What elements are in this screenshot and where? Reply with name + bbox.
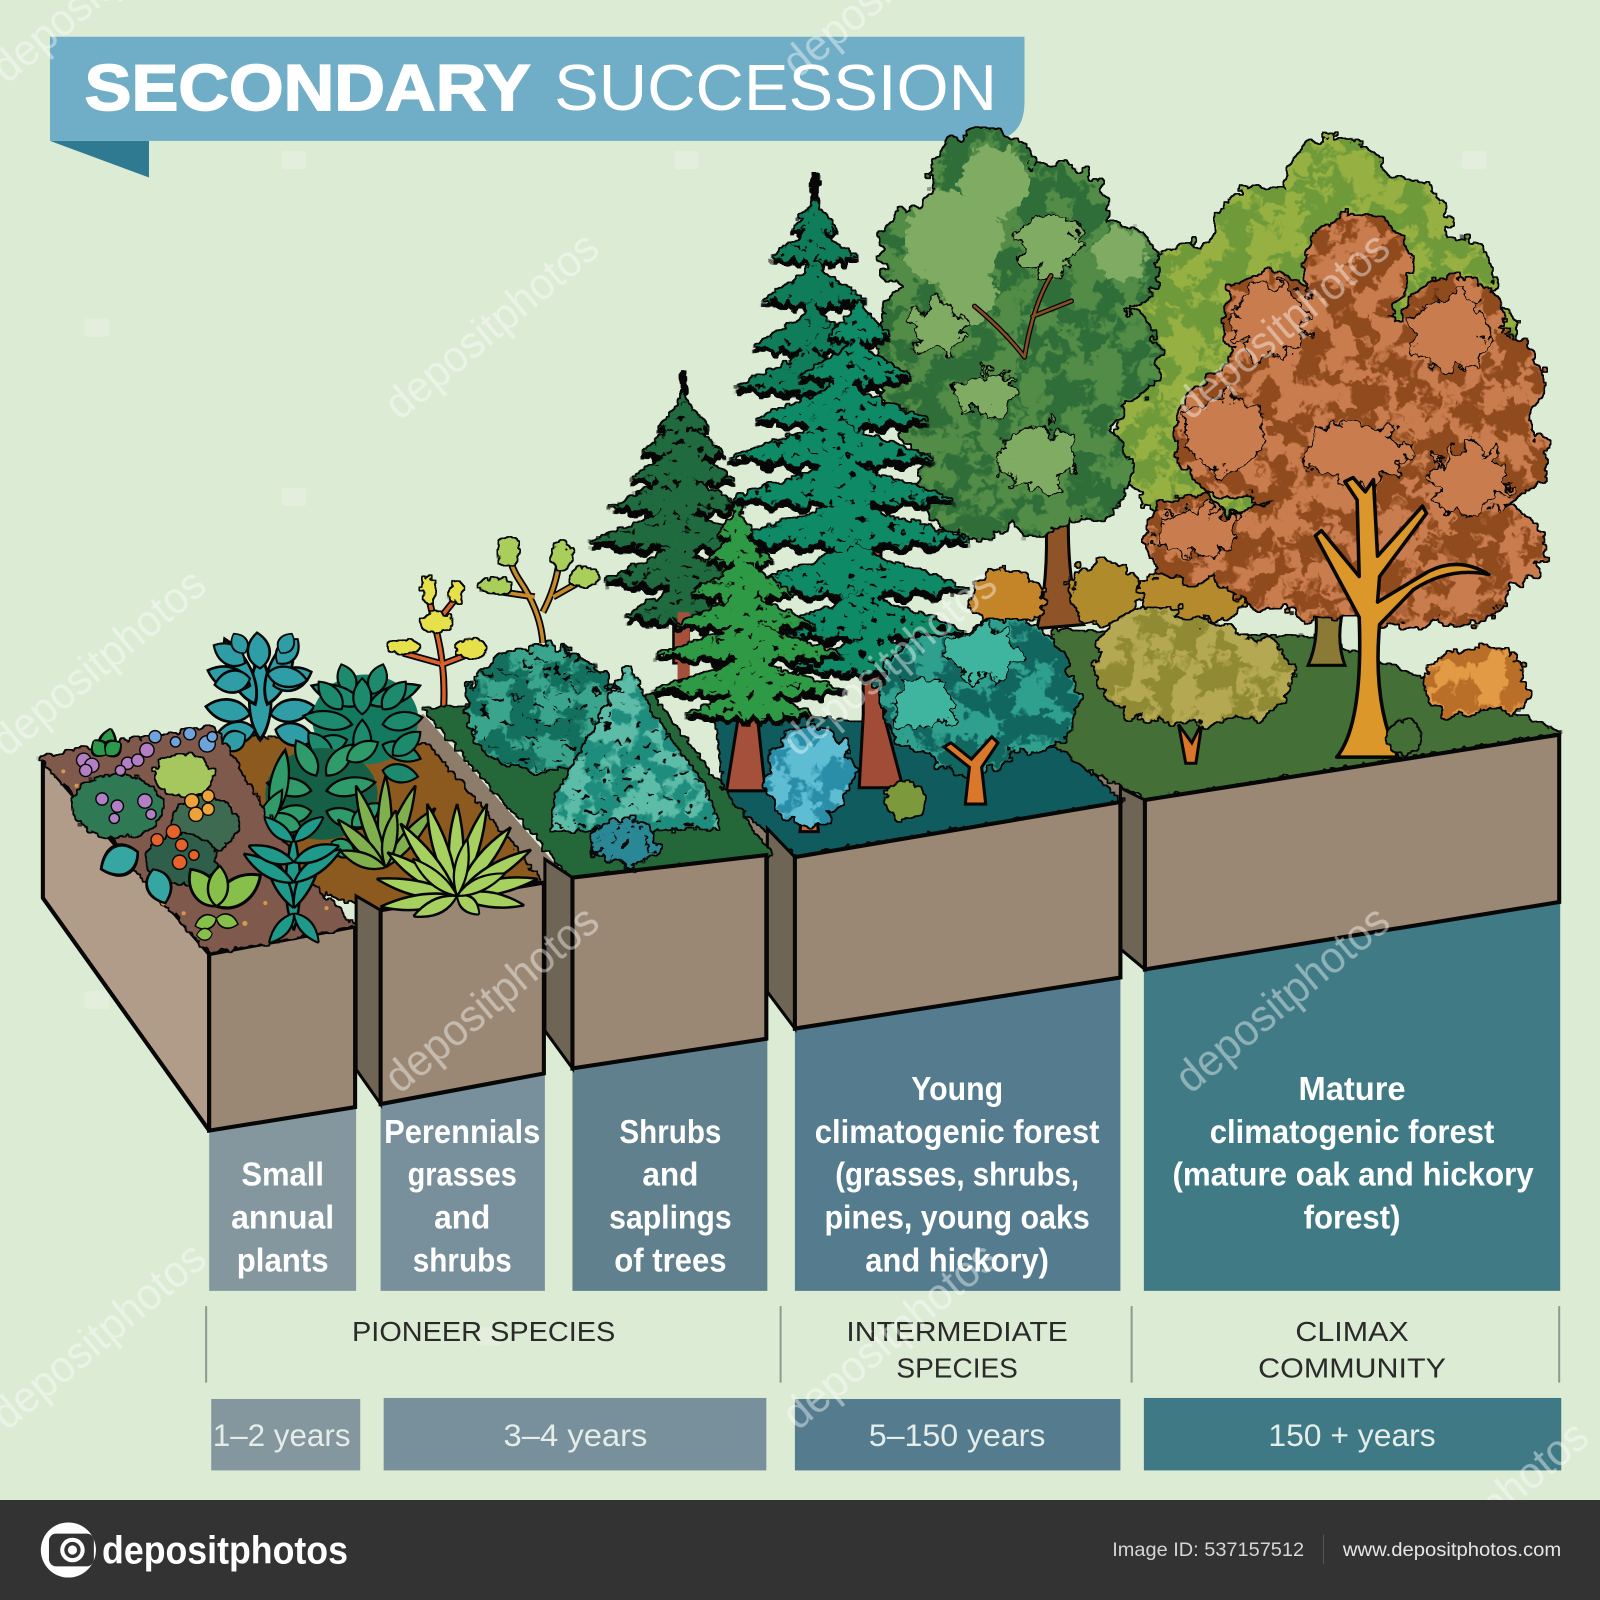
olive back tree bbox=[1117, 138, 1515, 526]
timeline: 3-4 years: 3–4 years bbox=[504, 1417, 647, 1453]
plant: teal grass bbox=[239, 811, 345, 948]
orange tree trunk bbox=[1315, 478, 1489, 757]
bright green conifer bbox=[652, 505, 848, 791]
green oak tree bbox=[874, 131, 1158, 538]
oak branches bbox=[974, 276, 1071, 357]
box 5 soil block and grass bbox=[1051, 631, 1560, 969]
olive bush bbox=[1097, 607, 1291, 763]
title: SECONDARY bbox=[85, 51, 531, 124]
panel: perennials label column bbox=[381, 1073, 545, 1291]
plant: purple flowers bbox=[72, 743, 162, 837]
tall teal conifer bbox=[735, 173, 882, 449]
panel: shrubs label column: and bbox=[642, 1157, 698, 1194]
orange mature tree bbox=[1146, 214, 1547, 628]
orange bush bbox=[1427, 646, 1527, 716]
teal round bush with trunk bbox=[880, 620, 1078, 804]
panel: small annual plants label column: plants bbox=[237, 1242, 329, 1279]
panel: shrubs label column: saplings bbox=[609, 1200, 732, 1237]
box 2 soil block bbox=[214, 735, 544, 1104]
plant: red-orange flowers bbox=[95, 824, 216, 907]
timeline: 150+ years bbox=[1144, 1398, 1561, 1470]
light blue bush bbox=[766, 729, 852, 832]
panel: small annual plants label column: Small bbox=[241, 1157, 324, 1194]
dark conifer bbox=[589, 372, 762, 663]
back tree trunks and golden bushes bbox=[970, 515, 1345, 665]
plant: blue flowers bbox=[149, 728, 217, 752]
panel: perennials label column: grasses bbox=[408, 1157, 517, 1194]
icon: camera logo bbox=[41, 1522, 96, 1578]
small blue shrub bbox=[594, 820, 655, 865]
plant: blue succulent bbox=[204, 630, 317, 757]
watermarks: depositphotos bbox=[1164, 894, 1399, 1103]
panel: perennials label column: shrubs bbox=[413, 1242, 512, 1279]
box 4 soil block and forest floor bbox=[714, 704, 1122, 1029]
panel: mature forest label column: Mature bbox=[1298, 1071, 1406, 1108]
label: climax community: COMMUNITY bbox=[1258, 1353, 1446, 1384]
panel: perennials label column: and bbox=[434, 1200, 490, 1237]
label: intermediate species: SPECIES bbox=[896, 1353, 1018, 1384]
footer bar bbox=[0, 1500, 1600, 1600]
label: intermediate species: INTERMEDIATE bbox=[846, 1316, 1068, 1347]
plant: bright green leaves bbox=[181, 862, 268, 941]
large teal conifer bbox=[724, 301, 969, 788]
panel: young forest label column: Young bbox=[911, 1071, 1003, 1108]
banner ribbon bbox=[50, 37, 1024, 141]
plant: pale green herb bbox=[155, 755, 212, 796]
panel: mature forest label column: climatogenic forest bbox=[1210, 1114, 1494, 1151]
small green tuft bbox=[87, 727, 126, 761]
sapling: yellow bbox=[389, 577, 486, 719]
plant: orange flowers bbox=[171, 790, 237, 851]
footer image id: Image ID: 537157512 bbox=[1112, 1539, 1304, 1561]
box 1 soil block bbox=[39, 727, 355, 1131]
small green bush bbox=[887, 783, 923, 819]
panel: young forest label column: (grasses, shrubs, bbox=[835, 1157, 1079, 1194]
footer url: www.depositphotos.com bbox=[1342, 1539, 1561, 1561]
watermarks: depositphotos bbox=[772, 1231, 1006, 1439]
watermarks: depositphotos bbox=[1164, 221, 1399, 429]
species group brackets bbox=[206, 1306, 1559, 1383]
timeline: 1-2 years: 1–2 years bbox=[213, 1417, 351, 1453]
cone shrub bbox=[551, 665, 719, 831]
plant: mid green bush bbox=[231, 734, 385, 863]
label: climax community bbox=[1258, 1316, 1446, 1384]
panel: young forest label column bbox=[795, 978, 1120, 1291]
small grass tuft bbox=[1388, 720, 1420, 753]
panel: mature forest label column: (mature oak and hickory bbox=[1172, 1157, 1534, 1194]
title light word: SUCCESSION bbox=[554, 51, 997, 124]
timeline: 1-2 years bbox=[211, 1399, 360, 1470]
label: intermediate species bbox=[846, 1316, 1068, 1384]
watermarks: depositphotos bbox=[374, 221, 608, 429]
panel: small annual plants label column bbox=[209, 1107, 356, 1291]
panel: shrubs label column bbox=[572, 1039, 767, 1291]
box 3 soil block and grass bbox=[255, 696, 771, 1068]
panel: shrubs label column: of trees bbox=[614, 1242, 727, 1279]
banner fold bbox=[50, 141, 149, 178]
faint watermark cameras bbox=[85, 151, 1487, 1346]
timeline: 5-150 years: 5–150 years bbox=[869, 1417, 1045, 1453]
footer brand: depositphotos bbox=[102, 1529, 348, 1572]
soil speckles bbox=[61, 769, 329, 939]
plant: yucca grasses bbox=[332, 775, 539, 924]
panel: mature forest label column: forest) bbox=[1304, 1200, 1401, 1237]
panel: young forest label column: climatogenic forest bbox=[815, 1114, 1099, 1151]
sapling: green bbox=[480, 537, 598, 643]
timeline: 150+ years: 150 + years bbox=[1268, 1417, 1436, 1453]
panel: perennials label column: Perennials bbox=[384, 1114, 540, 1151]
title banner bbox=[50, 37, 1024, 178]
label: pioneer species: PIONEER SPECIES bbox=[352, 1316, 615, 1347]
watermarks: depositphotos bbox=[772, 558, 1006, 766]
panel: small annual plants label column: annual bbox=[231, 1200, 334, 1237]
watermarks: depositphotos bbox=[374, 894, 608, 1103]
panel: young forest label column: and hickory) bbox=[865, 1242, 1049, 1279]
plant: dark green bush bbox=[302, 661, 426, 794]
panel: mature forest label column bbox=[1144, 902, 1560, 1291]
panel: young forest label column: pines, young oaks bbox=[824, 1200, 1090, 1237]
round shrub bbox=[467, 648, 614, 770]
panel: shrubs label column: Shrubs bbox=[619, 1114, 721, 1151]
label: climax community: CLIMAX bbox=[1295, 1316, 1409, 1347]
timeline: 3-4 years bbox=[384, 1398, 766, 1470]
timeline: 5-150 years bbox=[795, 1399, 1120, 1470]
